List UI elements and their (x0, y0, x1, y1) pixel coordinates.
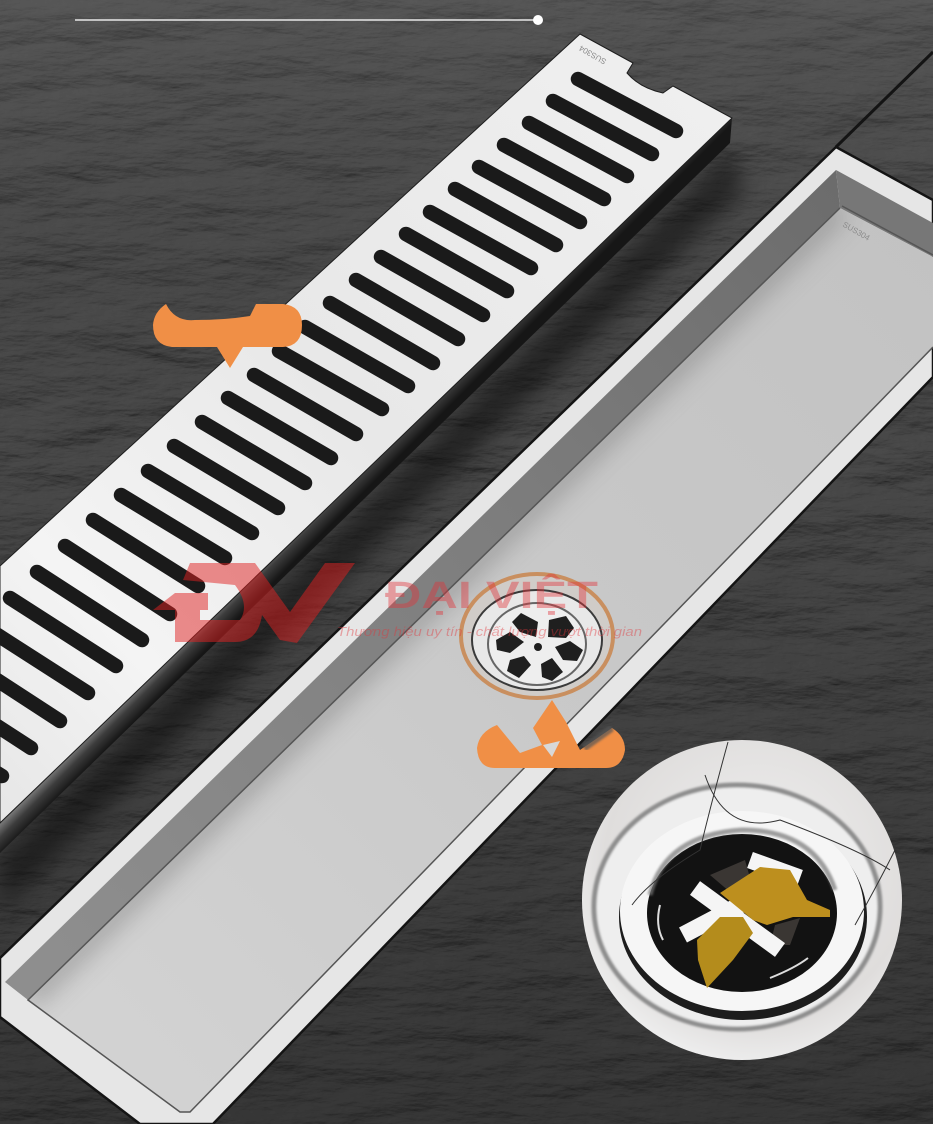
inner collar (620, 811, 864, 1011)
DV logo mark (153, 563, 355, 643)
outer groove ring (594, 785, 880, 1029)
grate side edge (0, 118, 732, 853)
inset outer disc (582, 740, 902, 1060)
chrome ring (472, 590, 602, 690)
watermark: Dai Viet logo and slogan (153, 563, 642, 643)
leaf left (697, 917, 753, 988)
copper ring (461, 574, 613, 698)
slotted stainless cover grate (0, 34, 732, 853)
top rule with dot (75, 15, 543, 25)
white cross strainer (683, 860, 800, 950)
leaf right (720, 867, 830, 925)
tray upper-right wall (836, 170, 933, 257)
round drain outlet with copper ring (461, 574, 613, 698)
stray hairs (632, 742, 895, 925)
slogan: Thương hiệu uy tín - chất lượng vượt thời gian (337, 625, 642, 639)
tray floor (28, 208, 933, 1112)
strainer plate (488, 603, 586, 685)
collar inner shading (650, 830, 835, 895)
tray upper-left wall (5, 170, 840, 1000)
strainer gap shading (710, 860, 800, 945)
orange callout: outlet (477, 700, 625, 768)
collar shadow crescent (619, 814, 867, 1020)
floor shading along wall (28, 208, 840, 1000)
floor edge lines (28, 208, 933, 1112)
grate top plate (0, 34, 732, 823)
engraved mark: SUS304 (577, 43, 608, 66)
orange callout: grate (153, 304, 302, 368)
white flecks in hair (658, 905, 808, 978)
dark hair-filled hole (647, 834, 837, 992)
circular inset: clogged strainer with hair and leaves (582, 740, 902, 1060)
strainer holes (496, 613, 583, 681)
slots (0, 79, 676, 776)
engraved mark on floor: SUS304 (841, 220, 872, 243)
brand name: ĐẠI VIỆT (385, 573, 598, 617)
